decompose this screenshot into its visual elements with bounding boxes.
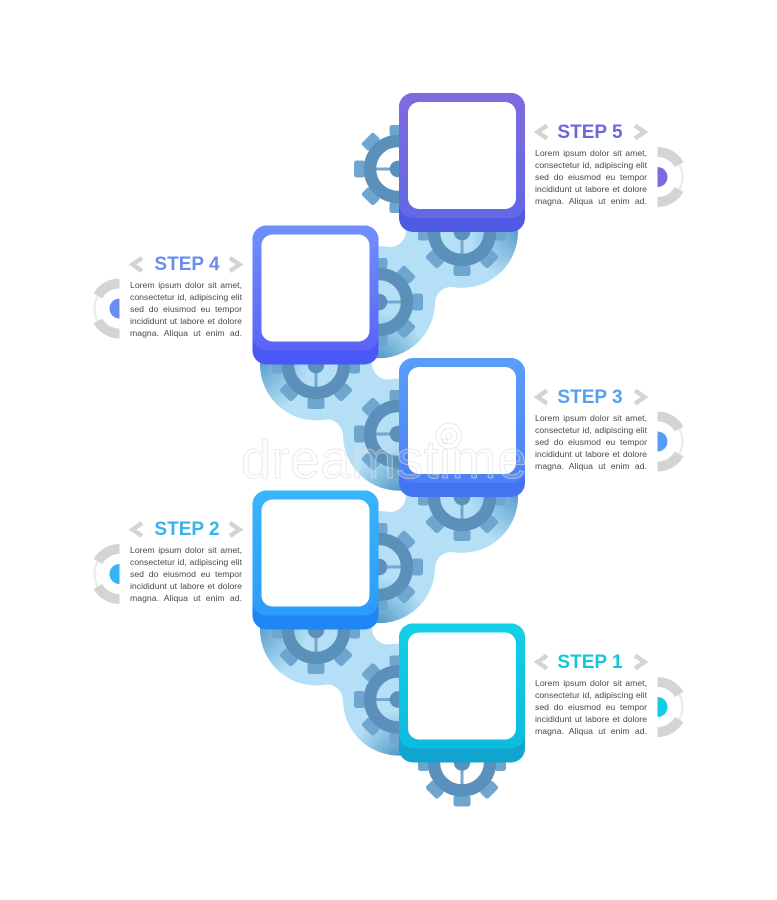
gear: step 2 right — [335, 523, 423, 611]
text block: step 3: incididunt ut labore et dolore — [535, 449, 647, 459]
text block: step 2: consectetur id, adipiscing elit — [130, 557, 242, 567]
watermark: dreamstime — [241, 430, 527, 490]
blob: steps 3 and 2 connector — [323, 441, 518, 623]
gear: step 3 bottom — [418, 453, 506, 541]
arrows: step 5 chevrons — [538, 126, 644, 138]
text block: step 4: sed do eiusmod eu tempor — [130, 304, 242, 314]
gear: step 3 left — [354, 390, 442, 478]
text block: step 1: consectetur id, adipiscing elit — [535, 690, 647, 700]
arrows: step 3 chevrons — [538, 390, 644, 404]
gear: step 5 left — [354, 125, 442, 213]
text block: step 5: STEP 5 — [557, 122, 623, 143]
text block: step 3 — [535, 387, 647, 471]
text block: step 1: incididunt ut labore et dolore — [535, 714, 647, 724]
text block: step 5: consectetur id, adipiscing elit — [535, 160, 647, 170]
text block: step 1: Lorem ipsum dolor sit amet, — [535, 678, 647, 688]
card: step 3 — [399, 358, 525, 497]
text block: step 4 — [130, 254, 242, 338]
text block: step 2: STEP 2 — [154, 519, 220, 540]
icon: ring step 1 — [658, 682, 682, 732]
text block: step 4: STEP 4 — [154, 254, 220, 275]
text block: step 2: magna. Aliqua ut enim ad. — [130, 593, 242, 603]
icon: ring step 4 — [94, 284, 120, 334]
card: step 2 — [252, 490, 378, 630]
text block: step 2: incididunt ut labore et dolore — [130, 581, 242, 591]
text block: step 4: consectetur id, adipiscing elit — [130, 292, 242, 302]
text block: step 2: Lorem ipsum dolor sit amet, — [130, 545, 242, 555]
text block: step 4: magna. Aliqua ut enim ad. — [130, 328, 242, 338]
text block: step 4: Lorem ipsum dolor sit amet, — [130, 280, 242, 290]
arrows: step 1 chevrons — [538, 656, 644, 668]
text block: step 2 — [130, 519, 242, 603]
blob: steps 2 and 1 connector — [260, 573, 455, 756]
card: step 5 — [399, 93, 525, 232]
text block: step 5: incididunt ut labore et dolore — [535, 184, 647, 194]
gear: step 5 bottom — [418, 188, 506, 276]
arrows: step 2 chevrons — [132, 523, 240, 536]
text block: step 1 — [535, 652, 647, 736]
card: step 1 — [399, 624, 525, 762]
text block: step 1: STEP 1 — [557, 652, 623, 673]
text block: step 5: magna. Aliqua ut enim ad. — [535, 196, 647, 206]
blob: steps 5 and 4 connector — [323, 176, 518, 358]
gear: step 1 bottom — [418, 718, 506, 806]
text block: step 4: incididunt ut labore et dolore — [130, 316, 242, 326]
text block: step 3: Lorem ipsum dolor sit amet, — [535, 413, 647, 423]
text block: step 3: consectetur id, adipiscing elit — [535, 425, 647, 435]
blob: steps 4 and 3 connector — [260, 308, 455, 491]
text block: step 5: Lorem ipsum dolor sit amet, — [535, 148, 647, 158]
text block: step 5 — [535, 122, 647, 206]
text block: step 3: STEP 3 — [557, 387, 623, 408]
text block: step 1: sed do eiusmod eu tempor — [535, 702, 647, 712]
card: step 4 — [252, 226, 378, 364]
text block: step 1: magna. Aliqua ut enim ad. — [535, 726, 647, 736]
icon: ring step 5 — [658, 152, 682, 202]
icon: ring step 2 — [94, 549, 120, 599]
icon: ring step 3 — [658, 416, 682, 466]
text block: step 5: sed do eiusmod eu tempor — [535, 172, 647, 182]
gear: step 1 left — [354, 656, 442, 744]
arrows: step 4 chevrons — [132, 258, 240, 271]
gear: step 4 bottom — [272, 321, 360, 409]
gear: step 4 right — [335, 258, 423, 346]
text block: step 3: magna. Aliqua ut enim ad. — [535, 461, 647, 471]
text block: step 3: sed do eiusmod eu tempor — [535, 437, 647, 447]
text block: step 2: sed do eiusmod eu tempor — [130, 569, 242, 579]
gear: step 2 bottom — [272, 586, 360, 674]
